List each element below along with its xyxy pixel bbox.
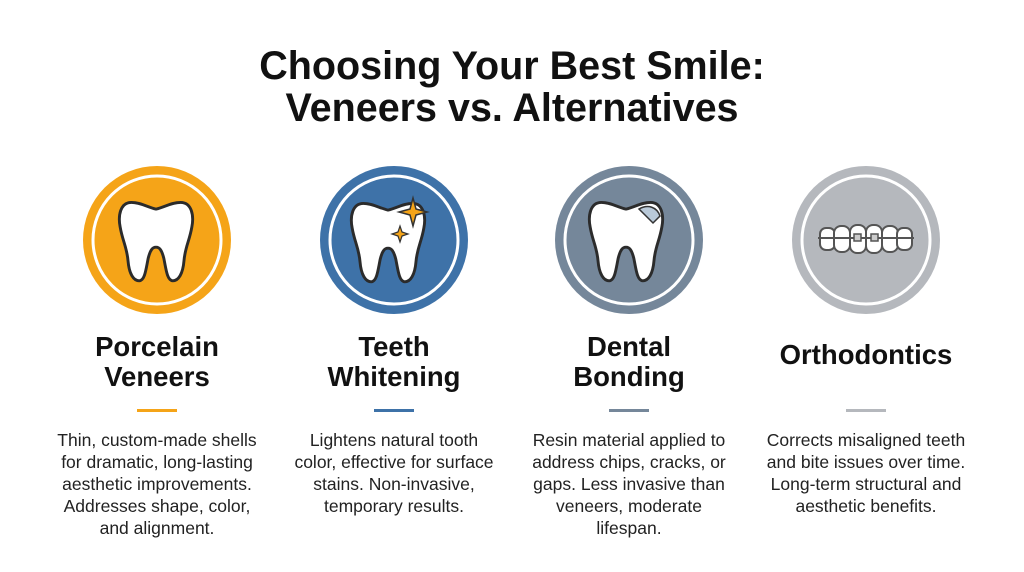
heading: Dental	[587, 331, 671, 362]
description	[532, 430, 726, 538]
title	[259, 44, 765, 130]
icon: chipped tooth	[555, 166, 703, 314]
heading: Teeth	[358, 331, 430, 362]
description: lifespan.	[596, 518, 662, 538]
description: aesthetic benefits.	[795, 496, 937, 516]
description: color, effective for surface	[294, 452, 494, 472]
description	[294, 430, 494, 516]
description: gaps. Less invasive than	[533, 474, 725, 494]
description: aesthetic improvements.	[62, 474, 252, 494]
panel: dental bonding	[532, 166, 726, 538]
description: Thin, custom-made shells	[57, 430, 257, 450]
heading: Bonding	[573, 361, 685, 392]
description: temporary results.	[324, 496, 464, 516]
heading: Whitening	[328, 361, 460, 392]
heading: Porcelain	[95, 331, 219, 362]
title: Veneers vs. Alternatives	[285, 86, 739, 130]
heading: Orthodontics	[780, 339, 952, 370]
heading	[95, 331, 219, 392]
description: stains. Non-invasive,	[313, 474, 475, 494]
panel: porcelain veneers	[57, 166, 257, 538]
icon: tooth with sparkles	[320, 166, 468, 314]
description: address chips, cracks, or	[532, 452, 726, 472]
description: and alignment.	[100, 518, 214, 538]
description	[57, 430, 257, 538]
description	[767, 430, 965, 516]
heading	[573, 331, 685, 392]
description: Resin material applied to	[533, 430, 725, 450]
panel: teeth whitening	[294, 166, 494, 516]
icon: tooth orange	[83, 166, 231, 314]
description: Long-term structural and	[771, 474, 961, 494]
description: and bite issues over time.	[767, 452, 965, 472]
description: veneers, moderate	[556, 496, 702, 516]
title: Choosing Your Best Smile:	[259, 44, 765, 88]
icon: braces	[792, 166, 940, 314]
description: Lightens natural tooth	[310, 430, 478, 450]
heading: Veneers	[104, 361, 210, 392]
panel: orthodontics	[767, 166, 965, 516]
description: Corrects misaligned teeth	[767, 430, 965, 450]
description: Addresses shape, color,	[64, 496, 250, 516]
description: for dramatic, long-lasting	[61, 452, 253, 472]
heading	[328, 331, 460, 392]
